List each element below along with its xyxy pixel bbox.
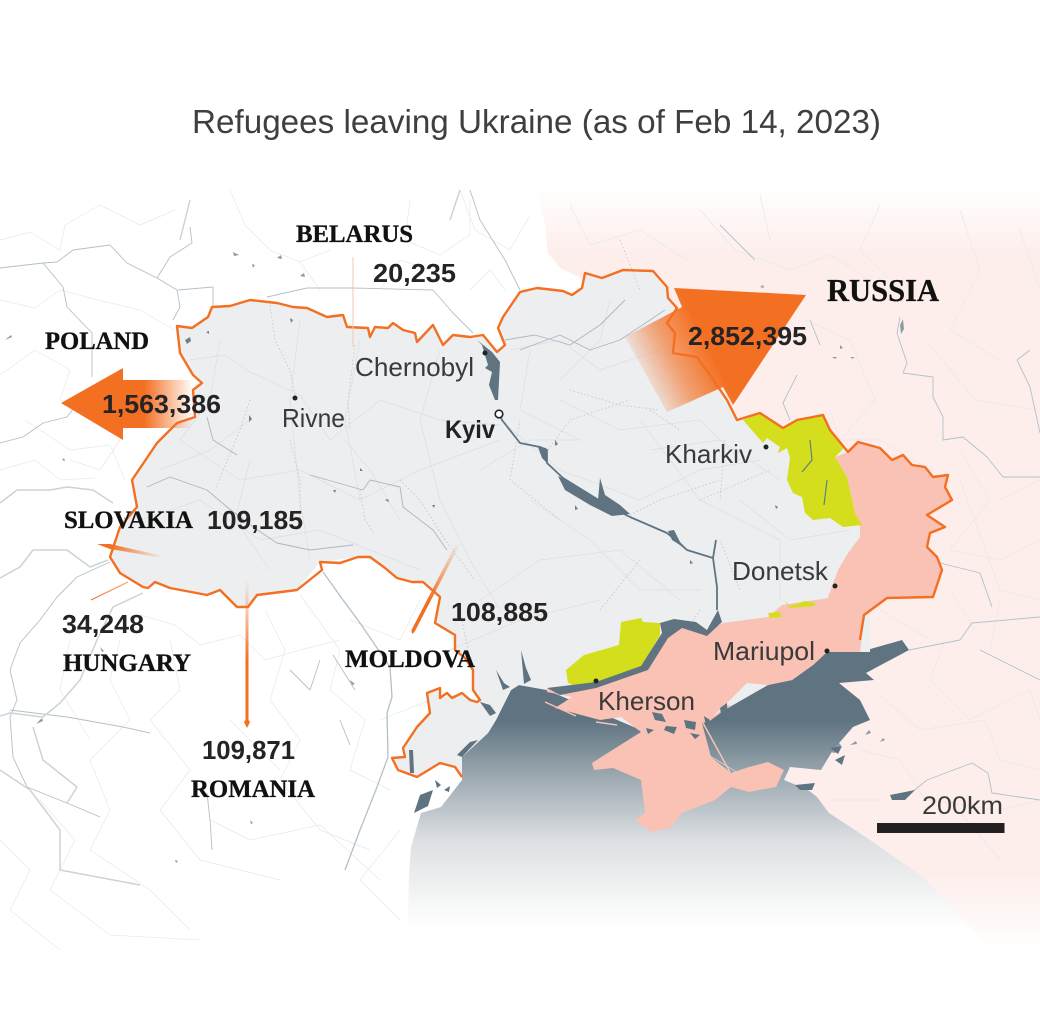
label: moldova: MOLDOVA (345, 646, 475, 673)
arrow: belarus (352, 257, 354, 347)
label: hungary: HUNGARY (63, 650, 191, 677)
base map lines outside ukraine (0, 190, 1040, 950)
city: donetsk: Donetsk (732, 556, 829, 586)
ukraine interior roads and rivers (140, 240, 925, 810)
city: kherson: Kherson (598, 686, 695, 716)
arrow: hungary (91, 582, 128, 600)
occupied territory (547, 442, 952, 832)
ukraine territory (110, 270, 870, 777)
label: russia: RUSSIA (827, 272, 939, 308)
label: romania: ROMANIA (191, 776, 315, 803)
value: belarus: 20,235 (373, 258, 456, 288)
label: belarus: BELARUS (296, 221, 413, 248)
value: slovakia: 109,185 (207, 505, 303, 535)
city: rivne: Rivne (282, 403, 345, 433)
label: poland: POLAND (45, 328, 149, 355)
value: moldova: 108,885 (451, 597, 548, 627)
city: chernobyl: Chernobyl (355, 352, 474, 382)
arrow: romania (244, 580, 250, 728)
city: mariupol: Mariupol (713, 636, 815, 666)
sea (407, 640, 1000, 960)
liberated territory kherson (566, 618, 660, 688)
value: poland: 1,563,386 (102, 389, 221, 419)
scale bar (877, 792, 1004, 833)
title: Refugees leaving Ukraine (as of Feb 14, 2023) (192, 103, 881, 140)
arrow: moldova (412, 543, 460, 634)
occupied spits (545, 702, 730, 772)
border of ukraine (110, 270, 952, 777)
city: kharkiv: Kharkiv (665, 439, 752, 469)
arrow: slovakia (97, 544, 163, 558)
label: slovakia: SLOVAKIA (64, 507, 193, 534)
value: romania: 109,871 (202, 735, 295, 765)
scale bar: 200km (922, 792, 1003, 820)
lower dnipro and coastal water (409, 610, 915, 813)
arrow: poland (61, 368, 193, 440)
liberated territory kharkiv (743, 413, 862, 527)
dnipro river and reservoirs (477, 340, 827, 610)
city: kyiv: Kyiv (445, 416, 495, 444)
liberated territory near donetsk (768, 600, 815, 618)
value: russia: 2,852,395 (688, 321, 807, 351)
value: hungary: 34,248 (62, 609, 144, 639)
arrow: russia (625, 288, 806, 412)
russia territory (535, 175, 1040, 980)
